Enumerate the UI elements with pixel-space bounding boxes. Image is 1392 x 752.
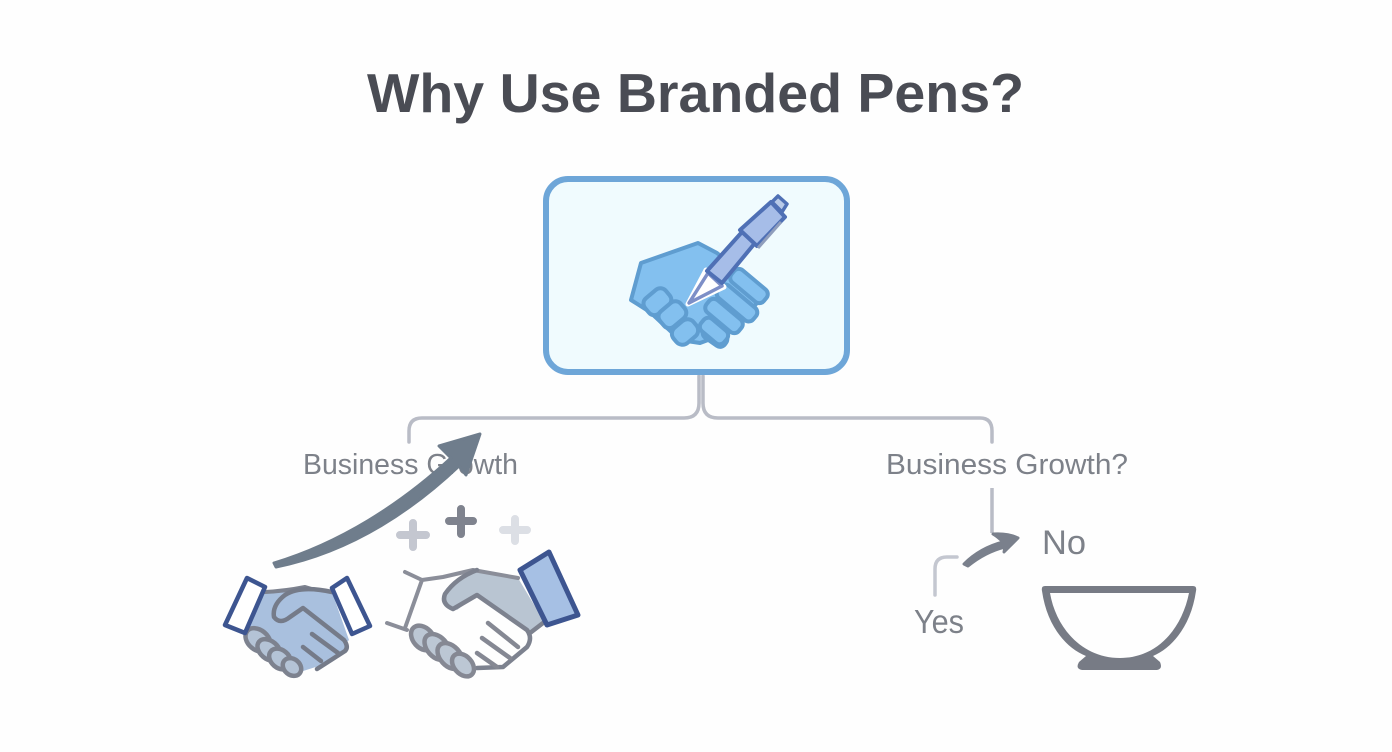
title: Why Use Branded Pens? [367, 62, 1024, 124]
label: no: No [1042, 524, 1086, 562]
icon: right handshake [387, 552, 578, 681]
icon: plus signs [400, 509, 527, 547]
icon: clasped hand [631, 243, 770, 349]
label: left branch: Business Growth [303, 449, 518, 481]
connector: question to no [990, 488, 994, 533]
arrow: yes to no [964, 534, 1018, 566]
arrow: growth [274, 434, 480, 567]
icon: empty bowl [1042, 586, 1196, 670]
label: right branch: Business Growth? [886, 449, 1128, 481]
connector: tree from central box to both branches [409, 376, 992, 442]
connector: yes stem [935, 557, 957, 595]
icon: left handshake [225, 578, 370, 680]
panel: central pen and handshake box [546, 179, 847, 372]
icon: pen [688, 196, 787, 304]
label: yes: Yes [914, 603, 964, 640]
